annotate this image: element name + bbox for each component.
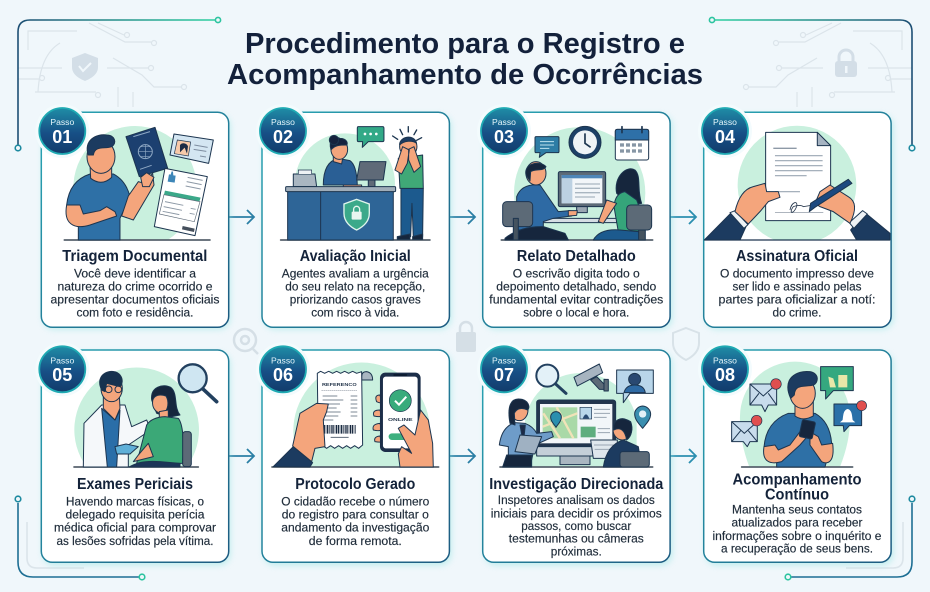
icon: faint center lock bbox=[456, 322, 476, 352]
badge: passo 01: Passo bbox=[50, 117, 74, 127]
text: step 05 description: Havendo marcas físicas, o bbox=[66, 495, 204, 509]
illustration: man with documents bbox=[64, 126, 213, 240]
badge: passo 05: 05 bbox=[52, 365, 72, 385]
illustration: receipt and phone: ONLINE bbox=[388, 417, 413, 422]
text: step 05 description: delegado requisita perícia bbox=[66, 508, 205, 522]
badge: passo 01 bbox=[35, 104, 89, 158]
panel: step 05 bbox=[35, 342, 230, 565]
icon: faint shield bbox=[72, 53, 98, 81]
badge: passo 05 bbox=[35, 342, 89, 396]
text: step 07 description: próximas. bbox=[551, 545, 602, 559]
arrow: step 7 to 8 bbox=[670, 449, 696, 463]
title: Procedimento para o Registro e bbox=[245, 28, 685, 60]
text: step 07 description: iniciais para decidir os próximos bbox=[491, 506, 662, 520]
text: step 03 description: O escrivão digita todo o bbox=[513, 266, 640, 280]
badge: passo 06: Passo bbox=[271, 356, 295, 366]
text: step 08 description: informações sobre o inquérito e bbox=[712, 529, 882, 543]
badge: passo 03: 03 bbox=[494, 127, 514, 147]
badge: passo 05: Passo bbox=[50, 356, 74, 366]
text: step 06 description: andamento da investigação bbox=[281, 521, 429, 535]
badge: passo 07: Passo bbox=[492, 356, 516, 366]
text: step 02 description: com risco à vida. bbox=[311, 305, 399, 319]
text: step 01 description bbox=[50, 266, 220, 319]
badge: passo 07 bbox=[477, 342, 531, 396]
heading: acompanhamento continuo bbox=[732, 471, 862, 503]
text: step 08 description: Mantenha seus contatos bbox=[732, 502, 862, 516]
badge: passo 04: 04 bbox=[715, 127, 735, 147]
circuit decoration: top left bbox=[18, 23, 186, 107]
text: step 05 description: as lesões sofridas pela vítima. bbox=[56, 534, 214, 548]
text: step 01 description: com foto e residência. bbox=[76, 305, 194, 319]
badge: passo 06: 06 bbox=[273, 365, 293, 385]
badge: passo 08 bbox=[698, 342, 752, 396]
text: step 07 description: passos, como buscar bbox=[521, 519, 631, 533]
text: step 04 description: ser lido e assinado pelas bbox=[732, 279, 862, 293]
heading: exames periciais: Exames Periciais bbox=[77, 476, 193, 493]
panel: step 01 bbox=[35, 104, 230, 329]
text: step 07 description bbox=[491, 493, 662, 559]
text: step 05 description: médica oficial para comprovar bbox=[54, 521, 216, 535]
badge: passo 02 bbox=[256, 104, 310, 158]
title: Acompanhamento de Ocorrências bbox=[227, 59, 703, 91]
text: step 04 description: partes para oficializar a notí: bbox=[718, 292, 876, 306]
illustration: statement at computer bbox=[501, 126, 653, 240]
badge: passo 08: 08 bbox=[715, 365, 735, 385]
panel: step 03 bbox=[477, 104, 672, 329]
text: step 07 description: Inspetores analisam os dados bbox=[498, 493, 655, 507]
text: step 08 description: atualizados para receber bbox=[732, 516, 862, 530]
badge: passo 07: 07 bbox=[494, 365, 514, 385]
heading: investigacao direcionada: Investigação Direcionada bbox=[489, 476, 664, 493]
heading: triagem documental: Triagem Documental bbox=[62, 248, 207, 265]
text: step 01 description: natureza do crime ocorrido e bbox=[58, 279, 213, 293]
badge: passo 02: 02 bbox=[273, 127, 293, 147]
heading: avaliacao inicial: Avaliação Inicial bbox=[300, 248, 411, 265]
text: step 04 description: do crime. bbox=[772, 305, 822, 319]
badge: passo 04: Passo bbox=[713, 117, 737, 127]
text: step 01 description: apresentar documentos oficiais bbox=[50, 292, 220, 306]
illustration: man receiving notifications bbox=[732, 362, 867, 467]
text: step 03 description: fundamental evitar contradições bbox=[489, 292, 663, 306]
arrow: step 6 to 7 bbox=[449, 449, 475, 463]
arrow: step 3 to 4 bbox=[670, 210, 696, 224]
panel: step 02 bbox=[256, 104, 451, 329]
illustration: signing the document bbox=[704, 126, 890, 240]
badge: passo 01: 01 bbox=[52, 127, 72, 147]
text: step 02 description: Agentes avaliam a urgência bbox=[282, 266, 429, 280]
title bbox=[227, 28, 703, 91]
panel: step 04 bbox=[698, 104, 893, 329]
text: step 02 description: do seu relato na recepção, bbox=[285, 279, 425, 293]
illustration: forensic exam bbox=[74, 364, 217, 467]
illustration: investigation monitor bbox=[499, 364, 653, 467]
text: step 03 description bbox=[489, 266, 663, 319]
text: step 06 description: O cidadão recebe o número bbox=[281, 495, 429, 509]
illustration: reception desk bbox=[281, 127, 430, 240]
circuit decoration: top right bbox=[744, 23, 912, 107]
heading: acompanhamento continuo: Acompanhamento bbox=[732, 471, 862, 488]
badge: passo 02: Passo bbox=[271, 117, 295, 127]
arrow: step 5 to 6 bbox=[229, 449, 254, 463]
panel: step 08 bbox=[698, 342, 893, 565]
text: step 06 description: de forma remota. bbox=[309, 534, 402, 548]
badge: passo 04 bbox=[698, 104, 752, 158]
panel: step 06 bbox=[256, 342, 451, 565]
text: step 08 description bbox=[712, 502, 882, 556]
text: step 01 description: Você deve identificar a bbox=[74, 266, 196, 280]
arrow: step 2 to 3 bbox=[449, 210, 475, 224]
text: step 02 description bbox=[282, 266, 429, 319]
text: step 04 description: O documento impresso deve bbox=[720, 266, 874, 280]
badge: passo 06 bbox=[256, 342, 310, 396]
text: step 08 description: a recuperação de seus bens. bbox=[721, 542, 873, 556]
text: step 03 description: sobre o local e hora. bbox=[523, 305, 629, 319]
heading: protocolo gerado: Protocolo Gerado bbox=[295, 476, 415, 493]
heading: assinatura oficial: Assinatura Oficial bbox=[736, 248, 858, 265]
arrow: step 1 to 2 bbox=[229, 210, 254, 224]
panel: step 07 bbox=[477, 342, 672, 565]
badge: passo 03: Passo bbox=[492, 117, 516, 127]
icon: faint eye bbox=[234, 329, 258, 354]
illustration: receipt and phone: REFERENCO bbox=[322, 382, 357, 387]
text: step 06 description bbox=[281, 495, 429, 548]
text: step 04 description bbox=[718, 266, 876, 319]
icon: faint center shield bbox=[673, 328, 699, 360]
text: step 05 description bbox=[54, 495, 216, 548]
illustration: receipt and phone bbox=[272, 363, 439, 467]
text: step 07 description: testemunhas ou câmeras bbox=[509, 532, 644, 546]
icon: faint lock bbox=[835, 50, 857, 77]
heading: relato detalhado: Relato Detalhado bbox=[517, 248, 636, 265]
badge: passo 08: Passo bbox=[713, 356, 737, 366]
text: step 02 description: priorizando casos graves bbox=[290, 292, 421, 306]
text: step 06 description: do registro para consultar o bbox=[282, 508, 429, 522]
heading: acompanhamento continuo: Contínuo bbox=[765, 486, 829, 503]
badge: passo 03 bbox=[477, 104, 531, 158]
text: step 03 description: depoimento detalhado, sendo bbox=[496, 279, 656, 293]
